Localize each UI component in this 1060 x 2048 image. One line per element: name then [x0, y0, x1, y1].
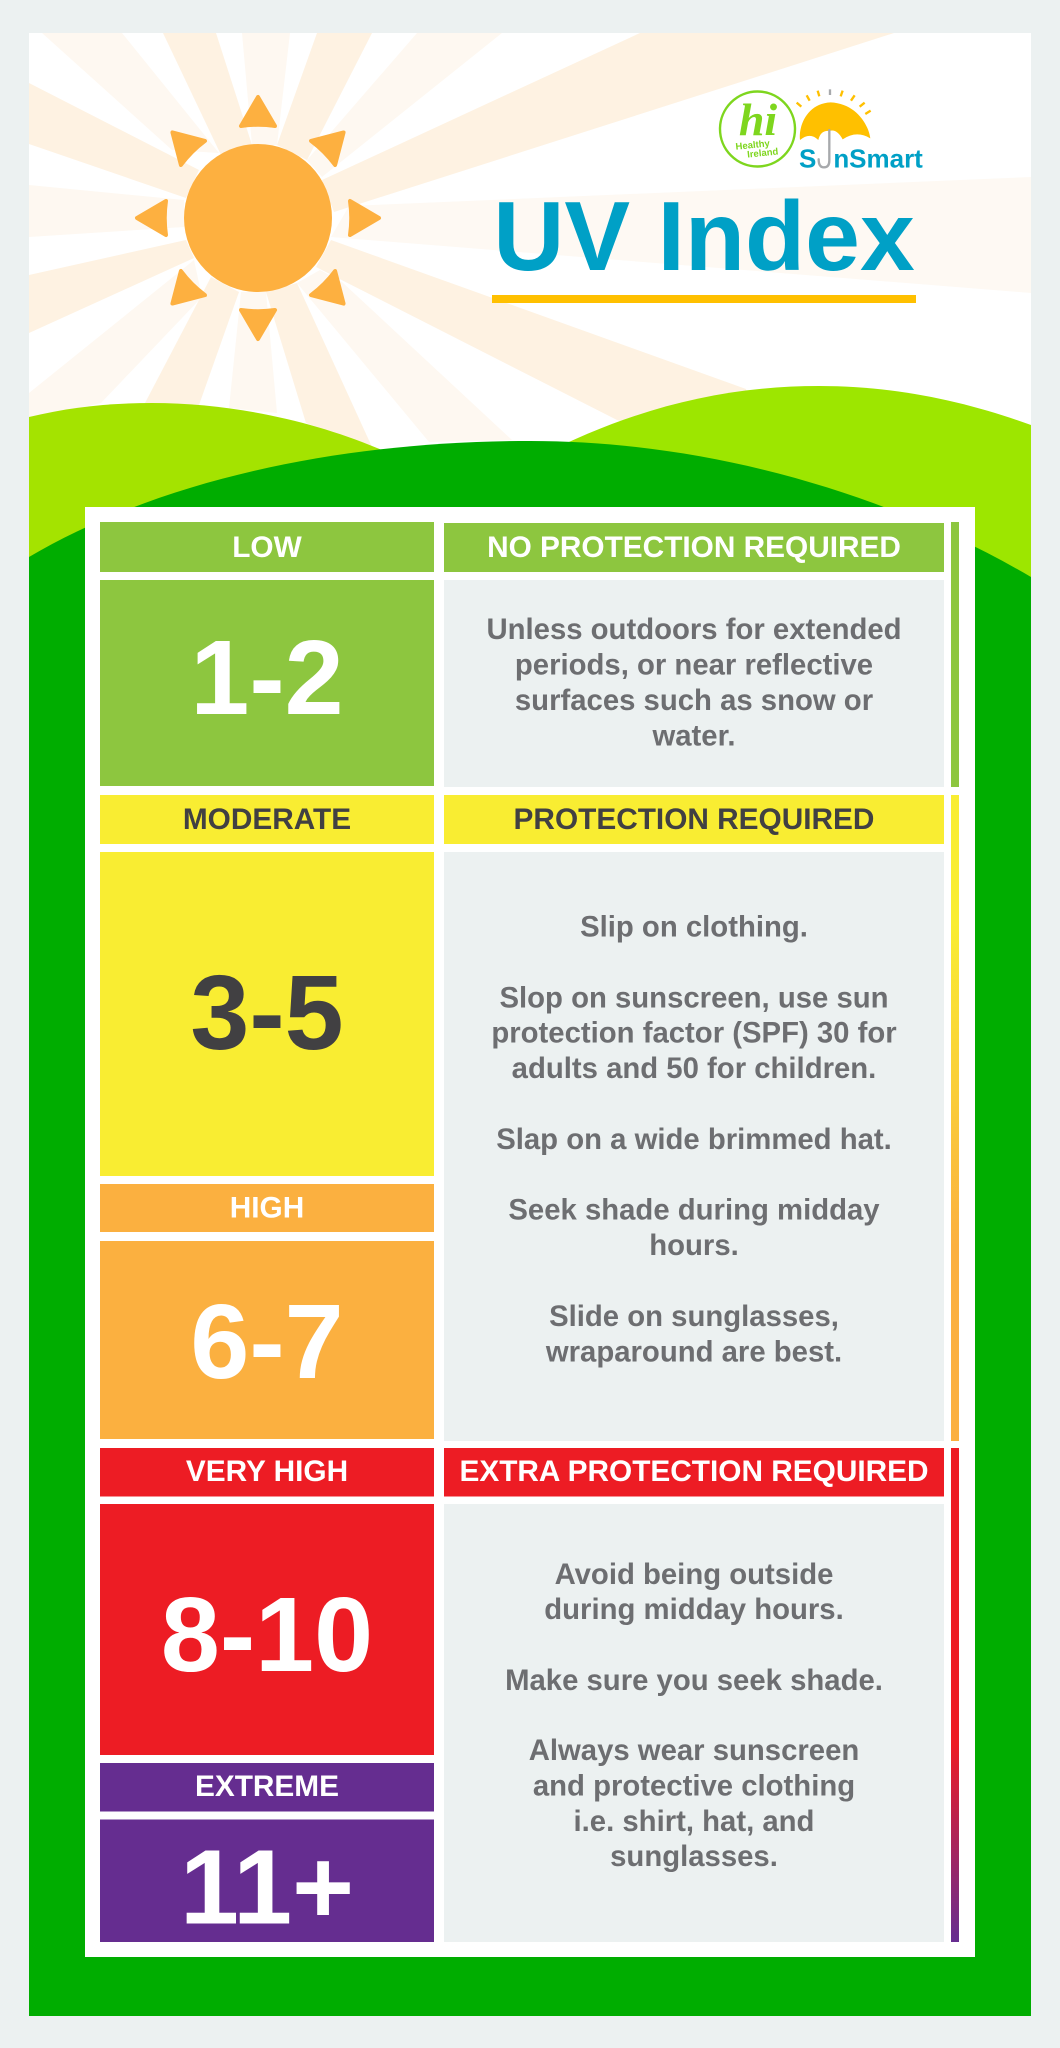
- no protection header: [444, 523, 944, 572]
- protection advice: hours.: [649, 1229, 739, 1262]
- high range: [100, 1241, 434, 1439]
- very high range: [100, 1504, 434, 1755]
- very high header: VERY HIGH: [186, 1455, 348, 1488]
- low side strip: [951, 522, 959, 787]
- protection advice: protection factor (SPF) 30 for: [491, 1017, 897, 1050]
- very high header: [100, 1448, 434, 1496]
- very high range: 8-10: [161, 1576, 373, 1694]
- extreme header: EXTREME: [195, 1770, 339, 1803]
- hill: foreground green: [29, 441, 1031, 2016]
- logo: Healthy Ireland: Healthy: [735, 138, 771, 153]
- SunSmart wordmark: S: [799, 143, 816, 173]
- moderate range: [100, 852, 434, 1176]
- row: low: [100, 522, 959, 787]
- hill: right: [540, 386, 1031, 600]
- logo: Healthy Ireland: [720, 92, 795, 166]
- protection advice: wraparound are best.: [545, 1335, 842, 1368]
- sky panel: [29, 33, 1031, 593]
- no protection advice: water.: [651, 719, 736, 752]
- logo: Healthy Ireland: hi: [739, 94, 777, 145]
- no protection advice: surfaces such as snow or: [515, 684, 873, 717]
- sun spikes: [137, 97, 379, 339]
- no protection header: NO PROTECTION REQUIRED: [487, 531, 901, 564]
- extra protection advice: during midday hours.: [544, 1593, 844, 1626]
- no protection advice: Unless outdoors for extended: [486, 613, 902, 646]
- protection advice: Slide on sunglasses,: [549, 1300, 839, 1333]
- protection advice: Slip on clothing.: [580, 910, 808, 944]
- moderate header: MODERATE: [183, 803, 351, 836]
- moderate header: [100, 795, 434, 844]
- protection advice: Slop on sunscreen, use sun: [499, 981, 889, 1014]
- sun: [137, 97, 379, 339]
- extra protection advice: sunglasses.: [610, 1840, 778, 1873]
- extra protection advice: Avoid being outside: [555, 1558, 833, 1591]
- low header: LOW: [232, 531, 303, 564]
- protection header: [444, 795, 944, 844]
- logo: Healthy Ireland: Ireland: [747, 146, 779, 161]
- extreme range: 11+: [180, 1828, 354, 1946]
- sun rays: [29, 33, 1031, 460]
- no protection advice: periods, or near reflective: [515, 649, 873, 682]
- low range: 1-2: [190, 619, 344, 737]
- protection header: PROTECTION REQUIRED: [514, 803, 874, 836]
- high range: 6-7: [190, 1283, 344, 1401]
- sun ticks: [797, 89, 871, 114]
- row: moderate and high: [100, 795, 959, 1441]
- extreme header: [100, 1763, 434, 1812]
- protection advice: [444, 852, 944, 1441]
- logo: SunSmart: nSmart: [833, 143, 923, 173]
- title: UV Index: [493, 181, 915, 291]
- extra protection advice: [444, 1504, 944, 1942]
- extra protection advice: i.e. shirt, hat, and: [574, 1805, 814, 1838]
- extra protection header: [444, 1448, 944, 1496]
- extra protection header: EXTRA PROTECTION REQUIRED: [459, 1455, 929, 1488]
- sun disc: [184, 144, 332, 292]
- no protection advice: [444, 580, 944, 787]
- table panel: [85, 507, 975, 1957]
- umbrella canopy: [800, 102, 870, 140]
- umbrella handle: [819, 130, 829, 167]
- title underline: [492, 295, 916, 303]
- high header: [100, 1184, 434, 1232]
- row: very high and extreme: [100, 1448, 959, 1946]
- protection advice: Seek shade during midday: [508, 1194, 880, 1227]
- protection advice: Slap on a wide brimmed hat.: [496, 1123, 892, 1156]
- extra protection advice: Make sure you seek shade.: [505, 1664, 883, 1697]
- low range: [100, 580, 434, 786]
- high header: HIGH: [230, 1192, 304, 1224]
- hill: left: [29, 403, 500, 600]
- protection advice: adults and 50 for children.: [512, 1052, 876, 1085]
- extra protection advice: Always wear sunscreen: [529, 1734, 859, 1767]
- low header: [100, 522, 434, 572]
- moderate range: 3-5: [190, 954, 344, 1072]
- extra protection advice: and protective clothing: [533, 1769, 855, 1802]
- extreme range: [100, 1820, 434, 1946]
- extra protection side strip: [951, 1448, 959, 1942]
- logo: SunSmart: [797, 89, 923, 173]
- protection side strip: [951, 795, 959, 1441]
